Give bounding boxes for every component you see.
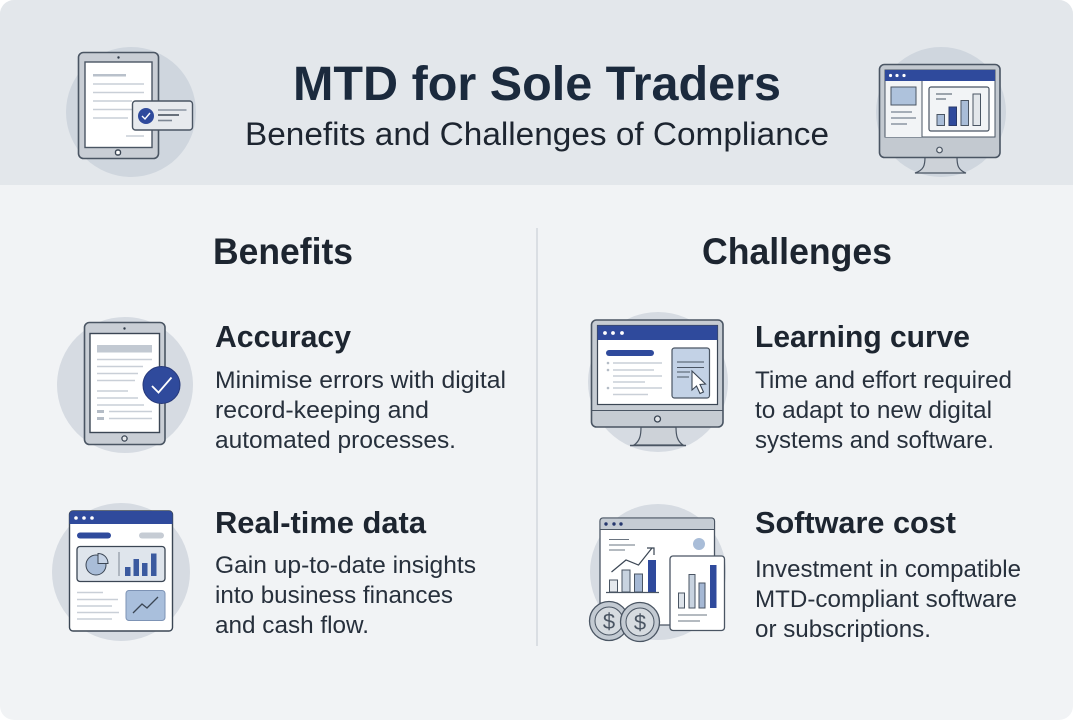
icon: charts and coins [590,504,726,642]
description: automated processes. [215,427,456,454]
description [215,552,476,639]
heading: Challenges: Challenges [702,231,892,272]
subtitle: Benefits and Challenges of Compliance [245,116,829,152]
description [215,367,506,454]
description: Gain up-to-date insights [215,552,476,579]
challenge: Software cost [590,504,1021,643]
benefit: Accuracy [57,317,506,454]
heading: Benefits: Benefits [213,231,353,272]
heading: Learning curve [755,319,970,354]
title: MTD for Sole Traders [293,58,781,111]
description: to adapt to new digital [755,397,992,424]
description: Investment in compatible [755,556,1021,583]
icon: desktop monitor dashboard [876,47,1006,177]
description [755,367,1012,454]
heading: Real-time data [215,505,427,540]
description: Time and effort required [755,367,1012,394]
description: and cash flow. [215,612,369,639]
description [755,556,1021,643]
icon: monitor with cursor [588,312,728,452]
icon: dashboard window [52,503,190,641]
icon: tablet with check card [66,47,196,177]
icon: charts and coins: $ [634,610,646,635]
description: MTD-compliant software [755,586,1017,613]
description: into business finances [215,582,453,609]
challenge: Learning curve [588,312,1012,454]
heading: Accuracy [215,319,352,354]
description: systems and software. [755,427,994,454]
description: or subscriptions. [755,616,931,643]
icon: charts and coins: $ [603,609,615,634]
heading: Software cost [755,505,956,540]
icon: tablet with check badge [57,317,193,453]
benefit: Real-time data [52,503,476,641]
description: record-keeping and [215,397,429,424]
description: Minimise errors with digital [215,367,506,394]
